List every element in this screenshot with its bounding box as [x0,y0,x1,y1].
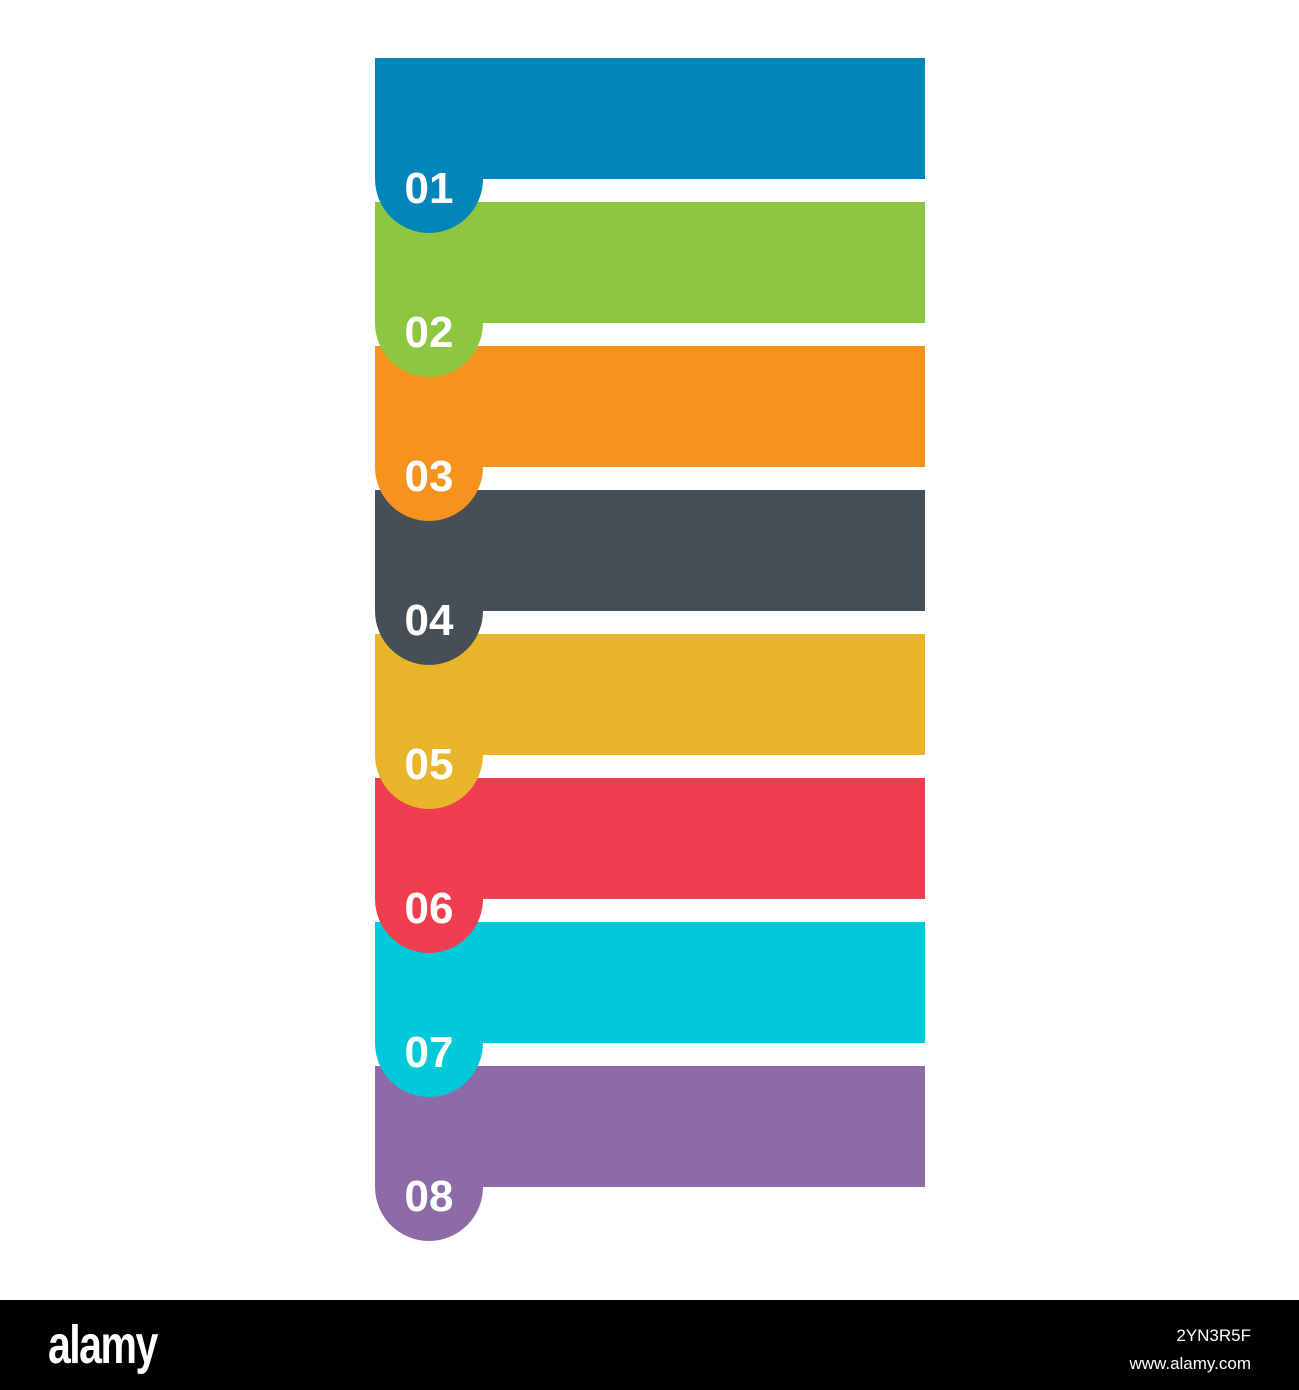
item 05: 05 [405,740,453,789]
item 01 [375,58,925,233]
item 06: 06 [405,884,453,933]
footer band [0,1300,1299,1390]
item 07: 07 [405,1028,453,1077]
item 03: 03 [405,452,453,501]
item 08 [375,1066,925,1241]
item 05 [375,634,925,809]
footer text: 2YN3R5F [1176,1326,1251,1345]
item 06 [375,778,925,953]
item 02 [375,202,925,377]
item 07 [375,922,925,1097]
item 03 [375,346,925,521]
item 04 [375,490,925,665]
item 04: 04 [405,596,453,645]
footer text: www.alamy.com [1129,1354,1251,1373]
footer text [1129,1326,1251,1373]
footer logo: alamy [48,1315,157,1375]
item 01: 01 [405,164,453,213]
item 02: 02 [405,308,453,357]
item 08: 08 [405,1172,453,1221]
